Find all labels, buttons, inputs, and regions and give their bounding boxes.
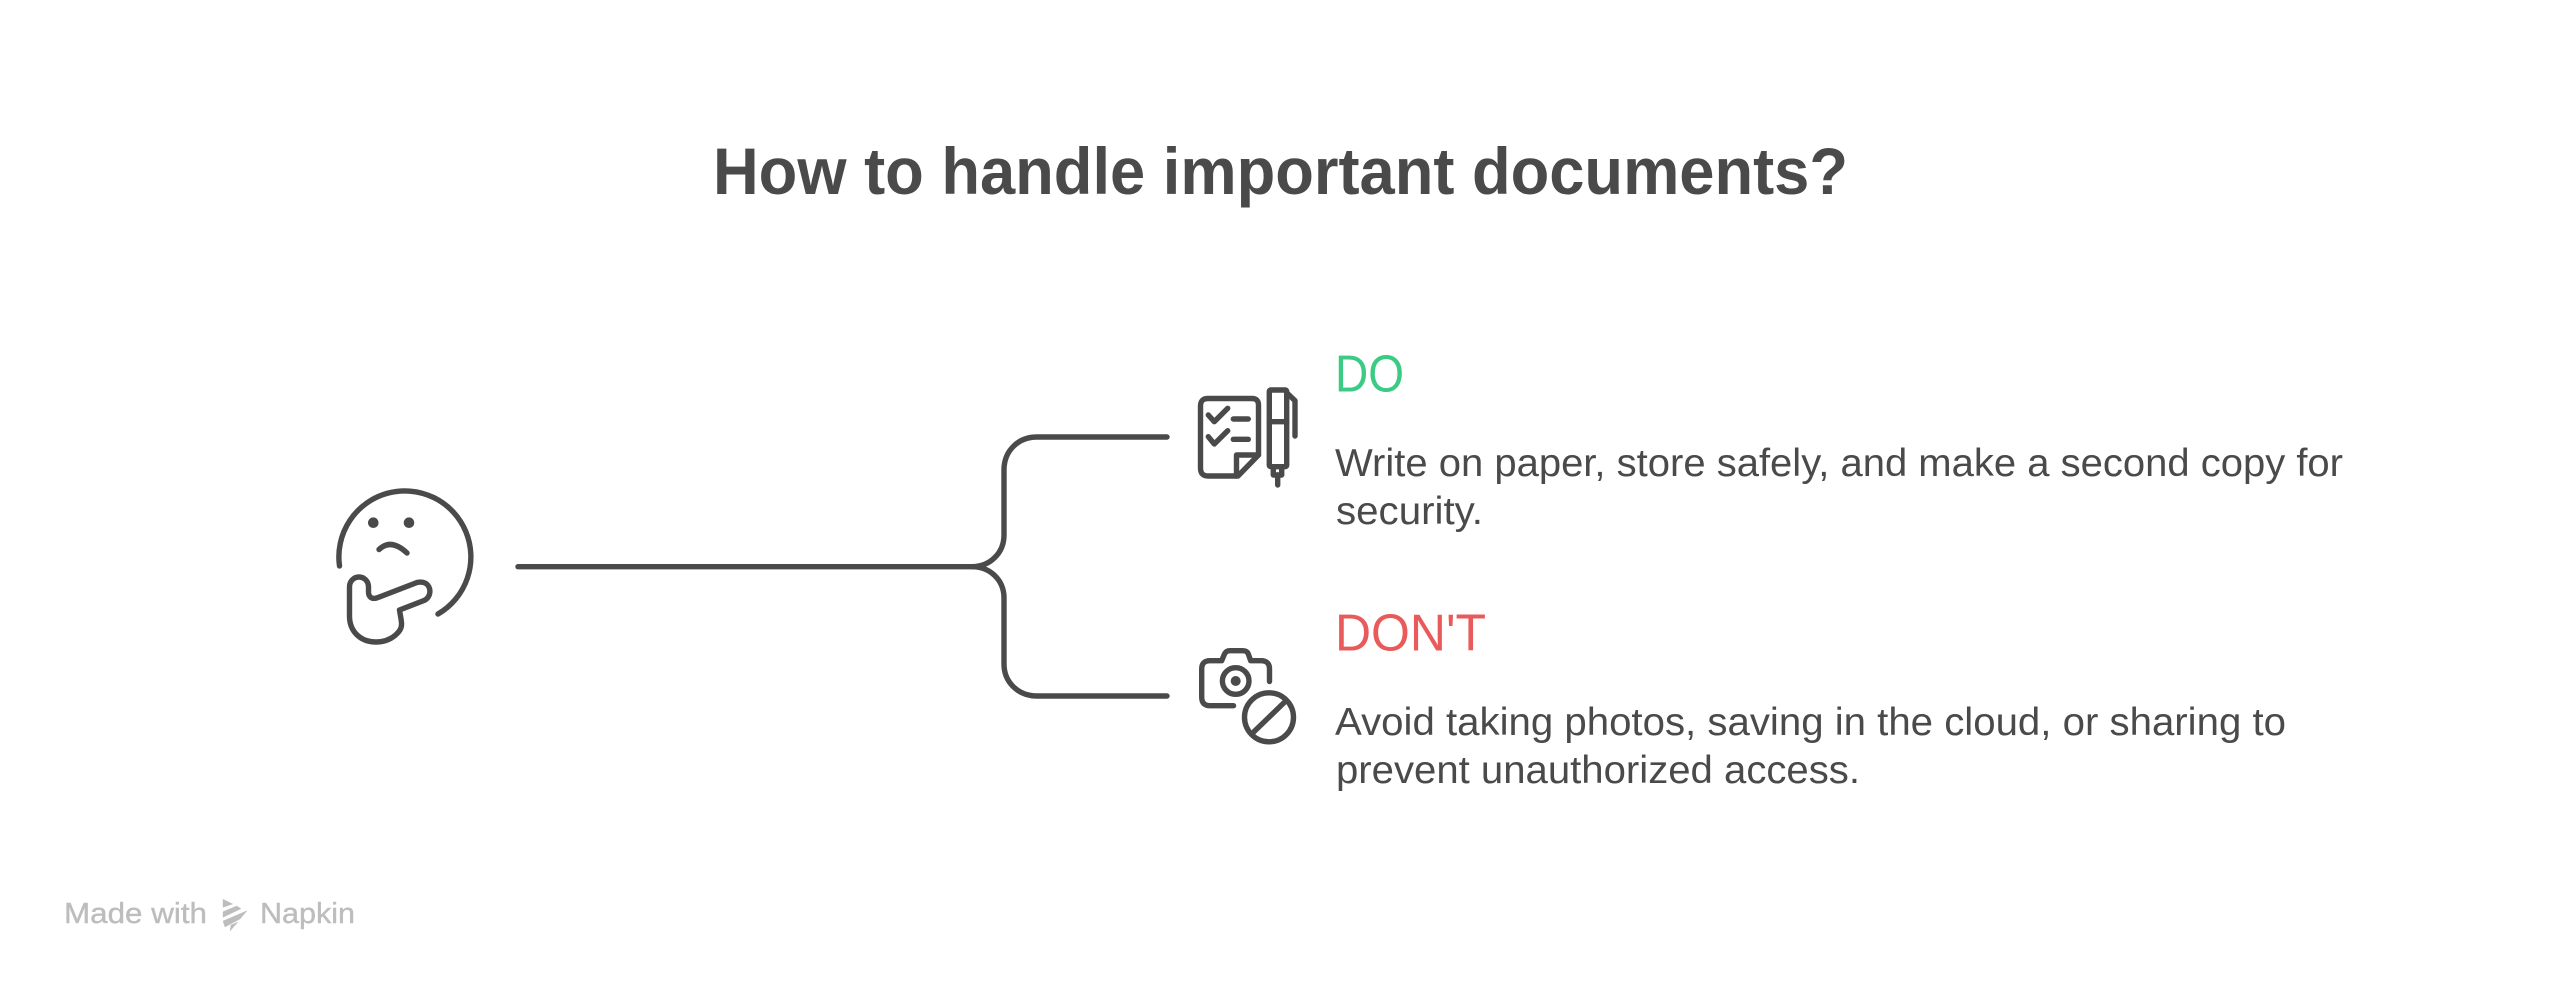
- panel: don't: [1335, 604, 2286, 792]
- text: do description: security.: [1336, 490, 1483, 533]
- icon: camera with prohibition sign: [1202, 651, 1294, 742]
- heading: don't: DON'T: [1335, 604, 1486, 662]
- footer: made with napkin: Made with: [64, 898, 207, 930]
- icon: checklist and pen: [1200, 390, 1295, 485]
- branching connector: [518, 437, 1167, 696]
- text: don't description: [1335, 701, 2286, 792]
- text: don't description: Avoid taking photos, saving in the cloud, or sharing to: [1335, 701, 2286, 744]
- title: How to handle important documents?: [713, 134, 1848, 208]
- text: do description: [1335, 442, 2343, 533]
- footer: made with napkin: Napkin: [260, 898, 355, 930]
- footer: made with napkin: [64, 898, 355, 931]
- icon: napkin logo: [223, 899, 247, 931]
- heading: do: DO: [1335, 346, 1404, 404]
- text: do description: Write on paper, store safely, and make a second copy for: [1335, 442, 2343, 485]
- text: don't description: prevent unauthorized access.: [1336, 749, 1860, 792]
- icon: thinking face: [339, 491, 471, 642]
- panel: do: [1335, 346, 2343, 533]
